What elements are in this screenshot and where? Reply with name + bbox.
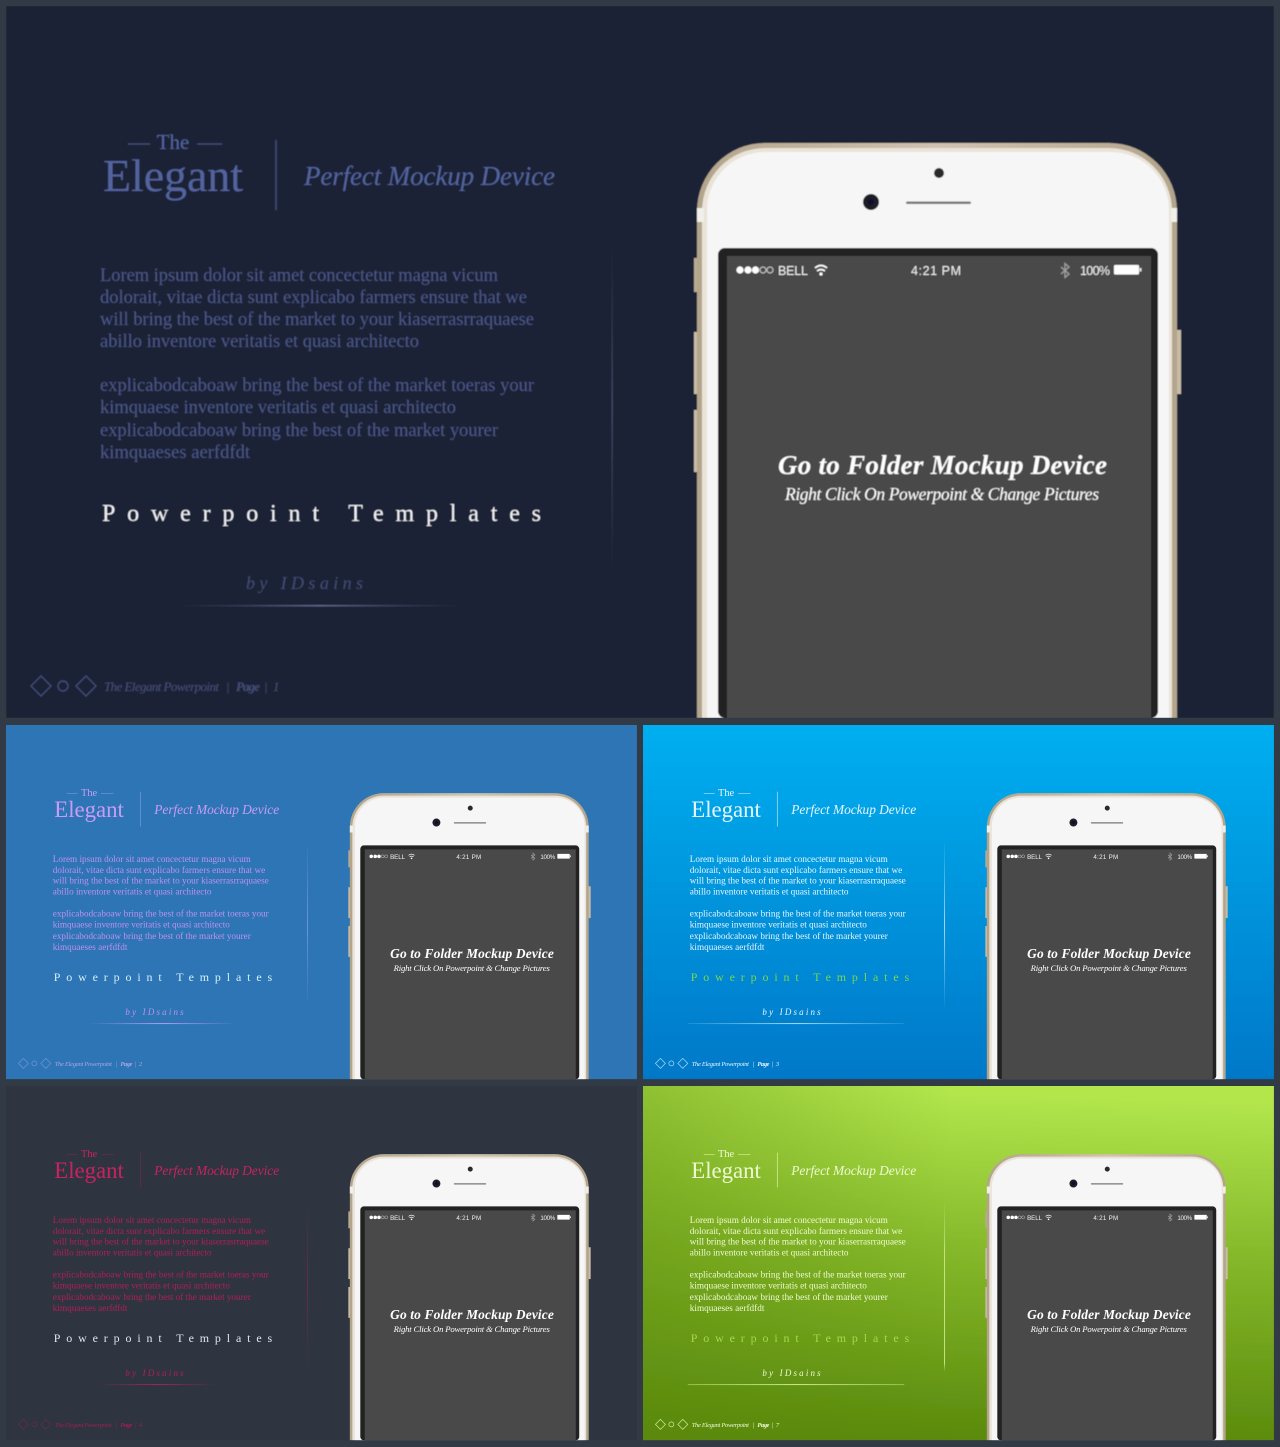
panel: blue slide: [6, 725, 637, 1079]
title block: The: [718, 1149, 735, 1160]
phone mockup: Go to Folder Mockup Device: [1027, 946, 1191, 961]
body text: kimquaese inventore veritatis et quasi architecto: [53, 1281, 230, 1291]
phone mockup: Go to Folder Mockup Device: [390, 1307, 554, 1322]
body text: will bring the best of the market to your kiaserrasrraquaese: [100, 310, 534, 330]
subtitle: Powerpoint Templates: [54, 1331, 273, 1345]
phone mockup: 4:21 PM: [1093, 854, 1118, 861]
title block: Elegant: [103, 150, 243, 201]
phone mockup: [348, 793, 591, 1079]
body text: dolorait, vitae dicta sunt explicabo farmers ensure that we: [690, 865, 902, 875]
title block: Elegant: [691, 797, 762, 822]
body text: Lorem ipsum dolor sit amet concectetur magna vicum: [100, 266, 499, 286]
body text: abillo inventore veritatis et quasi architecto: [690, 887, 849, 897]
footer: 7: [776, 1422, 780, 1429]
byline: by IDsains: [762, 1368, 821, 1378]
phone mockup: 100%: [540, 1215, 556, 1222]
panel: charcoal slide: [18, 1150, 591, 1440]
phone mockup: 4:21 PM: [1093, 1215, 1118, 1222]
phone mockup: Right Click On Powerpoint & Change Pictures: [1030, 1324, 1187, 1334]
footer: 1: [273, 679, 280, 694]
footer: Page: [757, 1422, 770, 1429]
body text: explicabodcaboaw bring the best of the market toeras your: [100, 376, 534, 396]
phone mockup: 4:21 PM: [456, 854, 481, 861]
body text: dolorait, vitae dicta sunt explicabo farmers ensure that we: [100, 288, 527, 308]
body text: will bring the best of the market to your kiaserrasrraquaese: [53, 876, 269, 886]
body text: explicabodcaboaw bring the best of the market yourer: [690, 931, 888, 941]
body text: explicabodcaboaw bring the best of the market toeras your: [690, 909, 906, 919]
body text: explicabodcaboaw bring the best of the market yourer: [690, 1292, 888, 1302]
phone mockup: 100%: [540, 854, 556, 861]
footer: The Elegant Powerpoint: [692, 1061, 749, 1068]
vertical rule: [307, 850, 308, 1000]
phone mockup: Go to Folder Mockup Device: [778, 450, 1107, 480]
panel: green slide: [643, 1086, 1274, 1440]
phone mockup: [985, 793, 1228, 1079]
byline: by IDsains: [125, 1007, 184, 1017]
title block: [54, 1149, 279, 1188]
vertical rule: [307, 1213, 308, 1358]
footer: [18, 1419, 143, 1429]
body text: abillo inventore veritatis et quasi architecto: [100, 332, 419, 352]
byline: by IDsains: [246, 573, 363, 593]
vertical rule: [944, 842, 946, 1008]
title block: Perfect Mockup Device: [153, 1163, 279, 1178]
body text: will bring the best of the market to your kiaserrasrraquaese: [53, 1237, 269, 1247]
phone mockup: 4:21 PM: [456, 1215, 481, 1222]
body text: abillo inventore veritatis et quasi architecto: [53, 887, 212, 897]
body text: [53, 1215, 269, 1313]
body text: kimquaese inventore veritatis et quasi architecto: [690, 920, 867, 930]
body text: kimquaeses aerfdfdt: [100, 443, 251, 463]
body text: Lorem ipsum dolor sit amet concectetur magna vicum: [690, 1215, 888, 1225]
title block: Elegant: [54, 1158, 125, 1183]
footer: Page: [236, 679, 260, 694]
footer: The Elegant Powerpoint: [55, 1422, 112, 1429]
byline: by IDsains: [125, 1368, 184, 1378]
body text: kimquaese inventore veritatis et quasi architecto: [690, 1281, 867, 1291]
footer: [18, 1058, 143, 1068]
title block: Perfect Mockup Device: [303, 161, 555, 191]
body text: explicabodcaboaw bring the best of the market toeras your: [53, 1270, 269, 1280]
phone mockup: 100%: [1177, 1215, 1193, 1222]
title block: [691, 1149, 916, 1188]
vertical rule: [944, 1205, 946, 1371]
body text: explicabodcaboaw bring the best of the market toeras your: [53, 909, 269, 919]
body text: dolorait, vitae dicta sunt explicabo farmers ensure that we: [53, 865, 265, 875]
title block: [54, 788, 279, 827]
phone mockup: BELL: [1027, 1215, 1043, 1222]
byline: [102, 1370, 212, 1386]
title block: [691, 788, 916, 827]
phone mockup: Right Click On Powerpoint & Change Pictures: [393, 1324, 550, 1334]
body text: explicabodcaboaw bring the best of the market toeras your: [690, 1270, 906, 1280]
phone mockup: BELL: [778, 264, 808, 278]
title block: Elegant: [691, 1158, 762, 1183]
body text: kimquaeses aerfdfdt: [53, 1303, 128, 1313]
body text: explicabodcaboaw bring the best of the market yourer: [53, 1292, 251, 1302]
subtitle: Powerpoint Templates: [691, 970, 910, 984]
phone mockup: 100%: [1080, 264, 1110, 278]
footer: |: [226, 679, 230, 694]
title block: [103, 130, 555, 210]
panel: main navy slide: [6, 6, 1274, 718]
body text: explicabodcaboaw bring the best of the market yourer: [100, 421, 498, 441]
title block: The: [157, 130, 189, 154]
body text: will bring the best of the market to your kiaserrasrraquaese: [690, 876, 906, 886]
footer: The Elegant Powerpoint: [104, 679, 219, 694]
subtitle: Powerpoint Templates: [54, 970, 273, 984]
footer: Page: [757, 1061, 770, 1068]
phone mockup: [348, 1154, 591, 1440]
body text: [53, 854, 269, 952]
body text: abillo inventore veritatis et quasi architecto: [690, 1248, 849, 1258]
body text: kimquaeses aerfdfdt: [690, 1303, 765, 1313]
footer: Page: [120, 1422, 133, 1429]
footer: |: [115, 1422, 117, 1429]
body text: abillo inventore veritatis et quasi architecto: [53, 1248, 212, 1258]
title block: Elegant: [54, 797, 125, 822]
body text: Lorem ipsum dolor sit amet concectetur magna vicum: [690, 854, 888, 864]
footer: [655, 1419, 780, 1429]
footer: 2: [139, 1061, 143, 1068]
footer: |: [134, 1061, 136, 1068]
phone mockup: 4:21 PM: [911, 264, 961, 278]
footer: |: [771, 1061, 773, 1068]
footer: Page: [120, 1061, 133, 1068]
subtitle: Powerpoint Templates: [691, 1331, 910, 1345]
footer: 3: [775, 1061, 779, 1068]
body text: [100, 266, 534, 463]
title block: Perfect Mockup Device: [790, 802, 916, 817]
phone mockup: Go to Folder Mockup Device: [390, 946, 554, 961]
footer: |: [752, 1422, 754, 1429]
body text: kimquaeses aerfdfdt: [53, 942, 128, 952]
title block: Perfect Mockup Device: [790, 1163, 916, 1178]
body text: kimquaeses aerfdfdt: [690, 942, 765, 952]
phone mockup: Right Click On Powerpoint & Change Pictures: [1030, 963, 1187, 973]
phone mockup: 100%: [1177, 854, 1193, 861]
footer: |: [752, 1061, 754, 1068]
footer: The Elegant Powerpoint: [692, 1422, 749, 1429]
vertical rule: [612, 235, 613, 580]
body text: kimquaese inventore veritatis et quasi architecto: [100, 398, 456, 418]
body text: dolorait, vitae dicta sunt explicabo farmers ensure that we: [53, 1226, 265, 1236]
footer: |: [264, 679, 268, 694]
footer: The Elegant Powerpoint: [55, 1061, 112, 1068]
phone mockup: BELL: [1027, 854, 1043, 861]
title block: The: [718, 788, 735, 799]
body text: Lorem ipsum dolor sit amet concectetur magna vicum: [53, 1215, 251, 1225]
body text: [690, 854, 906, 952]
panel: cyan slide: [643, 725, 1274, 1079]
title block: The: [81, 1149, 98, 1160]
body text: explicabodcaboaw bring the best of the market yourer: [53, 931, 251, 941]
body text: will bring the best of the market to your kiaserrasrraquaese: [690, 1237, 906, 1247]
byline: by IDsains: [762, 1007, 821, 1017]
footer: [31, 676, 280, 696]
footer: 4: [139, 1422, 143, 1429]
footer: |: [771, 1422, 773, 1429]
footer: |: [115, 1061, 117, 1068]
title block: Perfect Mockup Device: [153, 802, 279, 817]
title block: The: [81, 788, 98, 799]
subtitle: Powerpoint Templates: [102, 501, 541, 527]
phone mockup: Right Click On Powerpoint & Change Pictures: [393, 963, 550, 973]
footer: [655, 1058, 779, 1068]
body text: kimquaese inventore veritatis et quasi architecto: [53, 920, 230, 930]
body text: dolorait, vitae dicta sunt explicabo farmers ensure that we: [690, 1226, 902, 1236]
phone mockup: [694, 143, 1181, 718]
body text: [690, 1215, 906, 1313]
phone mockup: BELL: [390, 1215, 406, 1222]
phone mockup: [985, 1154, 1228, 1440]
phone mockup: Right Click On Powerpoint & Change Pictures: [784, 484, 1099, 504]
footer: |: [134, 1422, 136, 1429]
phone mockup: Go to Folder Mockup Device: [1027, 1307, 1191, 1322]
body text: Lorem ipsum dolor sit amet concectetur magna vicum: [53, 854, 251, 864]
phone mockup: BELL: [390, 854, 406, 861]
